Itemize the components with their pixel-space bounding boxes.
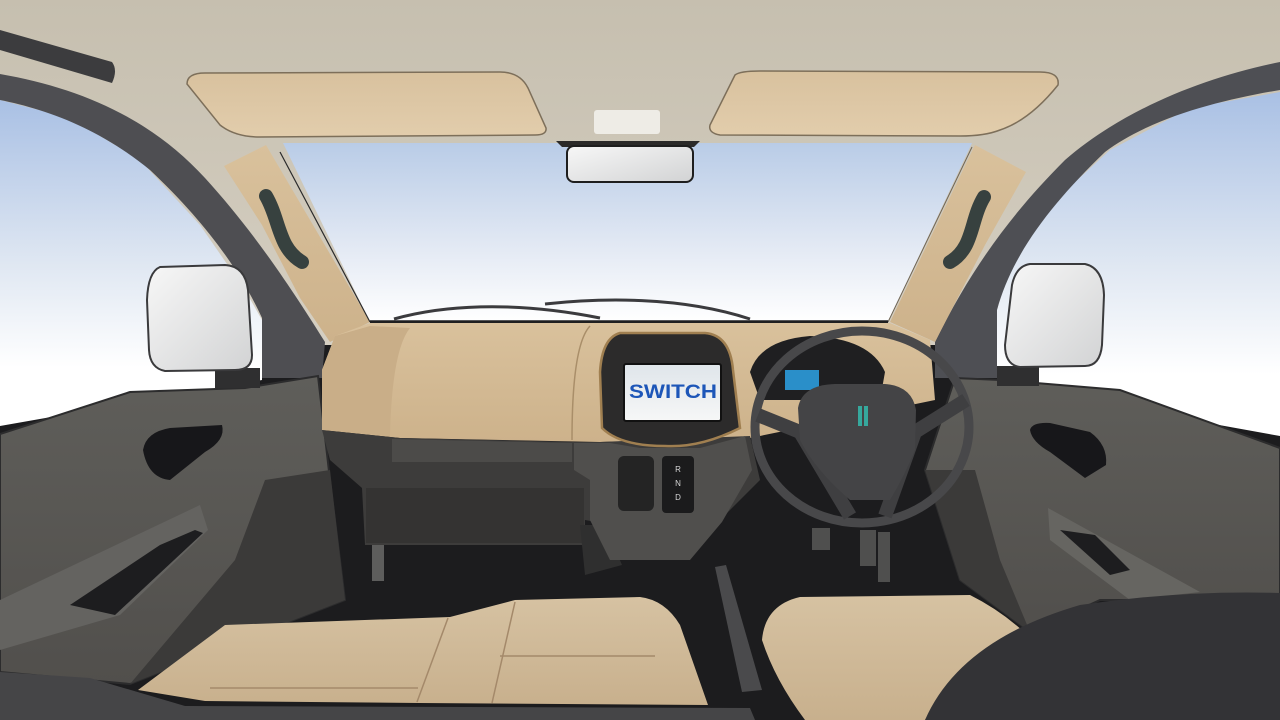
left door panel	[0, 376, 345, 684]
dashboard left end panel	[322, 326, 410, 436]
gear selector	[662, 456, 694, 513]
infotainment surround	[600, 333, 740, 446]
dashboard upper tan panel	[322, 323, 935, 442]
right door handle	[1030, 423, 1106, 478]
driver seat back	[925, 592, 1280, 720]
right A-pillar	[890, 145, 1026, 342]
left door armrest	[0, 505, 208, 650]
infotainment screen: SWITCH	[629, 382, 717, 403]
left door handle	[143, 425, 223, 480]
dashboard panel seam	[572, 326, 590, 440]
left grab rail	[0, 30, 115, 83]
right door lower recess	[925, 470, 1030, 632]
right door panel	[925, 378, 1280, 632]
glove compartment	[366, 488, 584, 543]
left pedal area	[372, 545, 384, 581]
left grab handle	[266, 196, 302, 262]
infotainment screen	[624, 364, 721, 421]
steering wheel	[755, 331, 969, 523]
windshield base edge	[370, 320, 888, 324]
right door pocket	[1060, 530, 1130, 575]
front right seat	[762, 595, 1024, 720]
gear selector: R	[675, 465, 681, 474]
right grab handle	[950, 197, 984, 262]
right sun visor	[710, 71, 1058, 136]
lower dashboard	[322, 430, 760, 545]
roof lining	[0, 0, 1280, 345]
right side mirror	[997, 264, 1104, 386]
gear selector: D	[675, 493, 681, 502]
seat seams	[210, 602, 655, 703]
right door armrest	[1048, 508, 1200, 600]
left door lower recess	[130, 470, 345, 684]
bottom left dark trim	[0, 672, 755, 720]
instrument binnacle	[750, 336, 885, 400]
wiper blades	[394, 300, 750, 319]
roof lamp	[594, 110, 660, 134]
centre console	[574, 436, 752, 560]
left side mirror	[147, 265, 260, 388]
left sun visor	[187, 72, 546, 137]
left windshield edge	[280, 152, 370, 322]
centre floor bracket	[580, 525, 622, 575]
rear view mirror	[556, 141, 700, 182]
left side window	[0, 100, 262, 426]
right door frame	[935, 62, 1280, 378]
handbrake lever	[715, 565, 762, 692]
windshield	[283, 143, 972, 322]
left A-pillar	[224, 145, 370, 342]
dash trim strip	[392, 439, 572, 462]
console storage tray	[618, 456, 654, 511]
front left bench seat	[138, 597, 708, 705]
left door pocket	[70, 530, 203, 615]
gear selector: N	[675, 479, 681, 488]
right windshield edge	[888, 147, 972, 322]
left door frame	[0, 74, 325, 378]
digital cluster display	[785, 370, 819, 390]
right pedals	[812, 528, 890, 582]
right side window	[997, 92, 1280, 436]
